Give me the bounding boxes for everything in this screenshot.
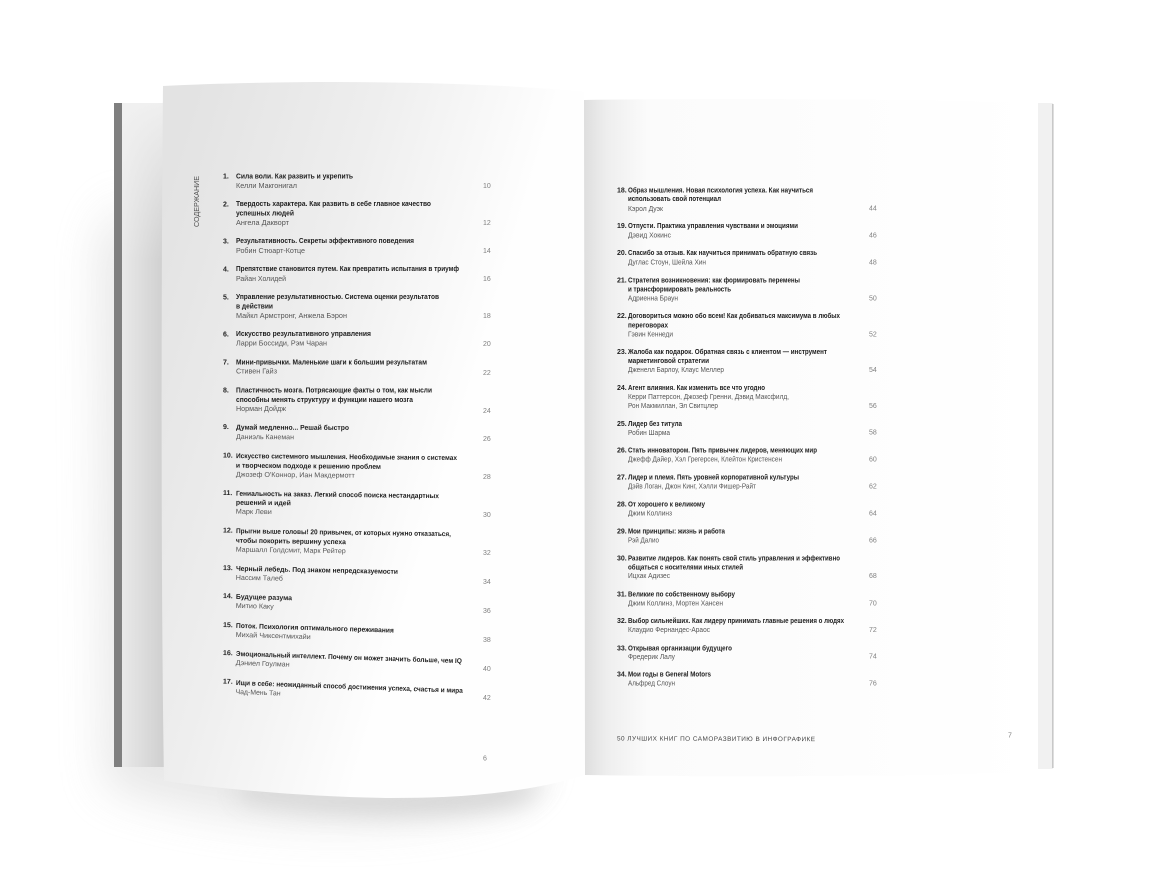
entry 25	[617, 420, 877, 437]
entry 20: 20.	[617, 250, 627, 257]
entry 24: Керри Паттерсон, Джозеф Гренни, Дэвид Максфилд,	[628, 394, 789, 401]
entry 14: Митио Каку	[236, 603, 274, 611]
entry 28: Джим Коллинз	[628, 510, 672, 518]
entry 4	[223, 266, 491, 283]
entry 1: Сила воли. Как развить и укрепить	[236, 174, 354, 180]
entry 3: Результативность. Секреты эффективного поведения	[236, 238, 414, 245]
entry 7: Мини-привычки. Маленькие шаги к большим результатам	[236, 358, 427, 366]
entry 18: 18.	[617, 188, 627, 194]
entry 15: Поток. Психология оптимального переживания	[236, 623, 394, 635]
entry 19: Дэвид Хокинс	[628, 232, 671, 240]
entry 5: 5.	[223, 294, 229, 302]
entry 22: переговорах	[628, 322, 668, 330]
entry 34: Мои годы в General Motors	[628, 672, 711, 678]
entry 10: 28	[483, 474, 491, 481]
entry 29: 66	[869, 538, 877, 544]
entry 8: Пластичность мозга. Потрясающие факты о том, как мысли	[236, 388, 432, 394]
entry 22: 52	[869, 332, 877, 338]
entry 25: 25.	[617, 421, 627, 428]
entry 21	[617, 278, 877, 302]
book drop shadow	[100, 200, 550, 821]
entry 21: 21.	[617, 278, 627, 284]
entry 14: 36	[483, 608, 491, 615]
entry 7: Стивен Гайз	[236, 368, 277, 376]
entry 19: 19.	[617, 223, 627, 230]
underlying left pages	[122, 103, 166, 767]
entry 18: Образ мышления. Новая психология успеха. Как научиться	[628, 186, 813, 194]
entry 15: 38	[483, 637, 491, 644]
entry 15	[223, 622, 491, 644]
entry 29: Мои принципы: жизнь и работа	[628, 528, 725, 536]
entry 18: 44	[869, 206, 877, 212]
entry 23: 54	[869, 367, 877, 374]
entry 24	[617, 385, 877, 410]
entry 30: Ицхак Адизес	[628, 573, 670, 580]
entry 17: 17.	[223, 679, 233, 686]
entry 12: Прыгни выше головы! 20 привычек, от которых нужно отказаться,	[236, 528, 451, 538]
entry 26	[617, 448, 877, 464]
entry 23: маркетинговой стратегии	[628, 357, 709, 365]
entry 7	[223, 358, 491, 377]
entry 11: Гениальность на заказ. Легкий способ поиска нестандартных	[236, 490, 439, 500]
entry 9	[223, 424, 491, 443]
entry 5: Майкл Армстронг, Анжела Бэрон	[236, 312, 347, 320]
entry 23: Жалоба как подарок. Обратная связь с клиентом — инструмент	[627, 348, 827, 356]
entry 6: Ларри Боссиди, Рэм Чаран	[236, 340, 327, 348]
entry 9: 26	[483, 436, 491, 443]
entry 26: 60	[869, 456, 877, 464]
entry 7: 22	[483, 370, 491, 377]
entry 15: 15.	[223, 622, 233, 629]
right contents list	[617, 186, 877, 688]
entry 6	[223, 331, 491, 348]
entry 3: Робин Стюарт-Котце	[236, 247, 305, 255]
entry 33: Фредерик Лалу	[628, 654, 675, 661]
left page	[162, 82, 585, 798]
entry 5: в действии	[236, 302, 273, 310]
entry 26: 26.	[617, 448, 627, 454]
entry 16: 40	[483, 666, 491, 673]
entry 16: Дэниел Гоулман	[236, 660, 290, 669]
left contents list	[222, 174, 491, 704]
entry 4: Райан Холидей	[236, 275, 286, 283]
entry 16: 16.	[223, 650, 233, 657]
entry 2: 12	[483, 220, 491, 227]
entry 27: Лидер и племя. Пять уровней корпоративной культуры	[628, 474, 799, 482]
entry 32: 32.	[617, 618, 627, 625]
section heading: contents: СОДЕРЖАНИЕ	[192, 176, 201, 227]
entry 14: 14.	[223, 593, 233, 600]
entry 21: и трансформировать реальность	[628, 286, 732, 294]
entry 3	[223, 238, 491, 255]
entry 20: Дуглас Стоун, Шейла Хин	[628, 258, 706, 266]
entry 10	[223, 452, 491, 481]
entry 19	[617, 223, 877, 240]
right page edge stack	[1036, 103, 1054, 769]
entry 10: Джозеф О'Коннор, Иан Макдермотт	[236, 472, 356, 480]
entry 24: 56	[869, 403, 877, 410]
entry 19: 46	[869, 232, 877, 240]
entry 26: Стать инноватором. Пять привычек лидеров, меняющих мир	[628, 448, 817, 454]
entry 24: Агент влияния. Как изменить все что угодно	[628, 385, 765, 392]
entry 8: Норман Дойдж	[236, 405, 286, 413]
entry 28	[617, 502, 877, 518]
entry 18: использовать свой потенциал	[628, 195, 721, 203]
entry 32: Выбор сильнейших. Как лидеру принимать главные решения о людях	[628, 617, 844, 625]
entry 21: Стратегия возникновения: как формировать перемены	[628, 278, 800, 284]
entry 3: 14	[483, 248, 491, 255]
entry 29	[617, 528, 877, 544]
entry 25: Лидер без титула	[628, 420, 682, 428]
entry 1: Келли Макгонигал	[236, 183, 297, 190]
entry 33: 33.	[617, 646, 627, 652]
entry 18: Кэрол Дуэк	[628, 206, 664, 213]
entry 25: Робин Шарма	[628, 429, 670, 437]
entry 11: Марк Леви	[236, 509, 272, 516]
entry 16: Эмоциональный интеллект. Почему он может значить больше, чем IQ	[236, 650, 462, 665]
right page number: 7	[1008, 732, 1012, 740]
entry 15: Михай Чиксентмихайи	[236, 631, 311, 641]
entry 9: Думай медленно... Решай быстро	[236, 424, 349, 432]
entry 17	[222, 679, 491, 704]
entry 9: Даниэль Канеман	[236, 434, 294, 441]
entry 12	[223, 528, 491, 557]
entry 12: Маршалл Голдсмит, Марк Рейтер	[236, 546, 346, 555]
entry 4: 16	[483, 276, 491, 283]
entry 17: Ищи в себе: неожиданный способ достижения успеха, счастья и мира	[236, 679, 463, 695]
entry 22	[617, 312, 877, 338]
entry 31: 70	[869, 600, 877, 608]
entry 5	[223, 294, 491, 320]
entry 19: Отпусти. Практика управления чувствами и эмоциями	[628, 223, 798, 230]
entry 8: способны менять структуру и функции нашего мозга	[236, 396, 413, 404]
entry 25: 58	[869, 430, 877, 436]
entry 12: чтобы покорить вершину успеха	[236, 537, 346, 546]
entry 14: Будущее разума	[236, 594, 292, 602]
entry 21: Адриенна Браун	[628, 296, 678, 302]
left page number: 6	[483, 756, 487, 762]
entry 8: 8.	[223, 388, 229, 394]
entry 27: 27.	[617, 474, 627, 482]
entry 22: 22.	[617, 313, 627, 320]
entry 34	[617, 672, 877, 688]
entry 30	[617, 554, 877, 580]
entry 33: 74	[869, 654, 877, 660]
entry 24: 24.	[617, 385, 627, 392]
entry 13: 34	[483, 579, 491, 586]
entry 10: Искусство системного мышления. Необходимые знания о системах	[236, 452, 457, 462]
entry 11: 30	[483, 512, 491, 519]
entry 28: 64	[869, 510, 877, 518]
entry 2: 2.	[223, 202, 229, 208]
entry 24: Рон Макмиллан, Эл Свитцлер	[628, 403, 718, 410]
entry 1	[223, 174, 491, 190]
entry 29: Рэй Далио	[628, 536, 659, 544]
entry 4: 4.	[223, 266, 229, 274]
entry 34: Альфред Слоун	[628, 680, 675, 688]
entry 18	[617, 186, 877, 213]
entry 31: Великие по собственному выбору	[628, 590, 735, 598]
entry 29: 29.	[617, 528, 627, 536]
entry 30: 68	[869, 573, 877, 580]
entry 30: Развитие лидеров. Как понять свой стиль управления и эффективно	[628, 554, 840, 562]
entry 31: 31.	[617, 592, 627, 598]
entry 8: 24	[483, 408, 491, 415]
entry 30: 30.	[617, 556, 627, 562]
entry 20: 48	[869, 260, 877, 266]
entry 14	[223, 593, 491, 615]
entry 30: общаться с носителями иных стилей	[628, 564, 743, 572]
entry 9: 9.	[223, 424, 229, 431]
entry 21: 50	[869, 296, 877, 302]
entry 28: 28.	[617, 502, 627, 508]
entry 5: Управление результативностью. Система оценки результатов	[236, 294, 440, 301]
entry 2: Ангела Дакворт	[236, 220, 290, 227]
entry 17: Чад-Мень Тан	[235, 689, 281, 698]
entry 34: 34.	[617, 672, 627, 678]
entry 11	[223, 490, 491, 519]
entry 33: Открывая организации будущего	[628, 644, 732, 652]
entry 23: Дженелл Барлоу, Клаус Меллер	[628, 367, 724, 374]
book title footer: 50 ЛУЧШИХ КНИГ ПО САМОРАЗВИТИЮ В ИНФОГРАФИКЕ	[617, 736, 815, 743]
entry 3: 3.	[223, 238, 229, 246]
entry 23: 23.	[617, 349, 627, 356]
entry 32: Клаудио Фернандес-Араос	[628, 627, 710, 634]
entry 6: 6.	[223, 332, 229, 338]
entry 5: 18	[483, 313, 491, 320]
entry 2: Твердость характера. Как развить в себе главное качество	[236, 200, 431, 208]
back cover edge	[114, 103, 122, 767]
entry 8	[223, 388, 491, 415]
entry 22: Гэвин Кеннеди	[628, 332, 673, 338]
entry 6: 20	[483, 341, 491, 348]
entry 28: От хорошего к великому	[628, 502, 705, 508]
entry 13: Нассим Талеб	[236, 574, 283, 583]
entry 12: 32	[483, 550, 491, 557]
entry 12: 12.	[223, 528, 233, 535]
entry 31: Джим Коллинз, Мортен Хансен	[628, 600, 723, 608]
entry 34: 76	[869, 680, 877, 688]
entry 10: 10.	[223, 453, 233, 460]
entry 1: 10	[483, 183, 491, 190]
entry 27: Дэйв Логан, Джон Кинг, Хэлли Фишер-Райт	[628, 482, 757, 490]
entry 6: Искусство результативного управления	[236, 331, 371, 338]
entry 13: 13.	[223, 565, 233, 572]
entry 32: 72	[869, 627, 877, 634]
entry 2	[223, 200, 491, 227]
entry 10: и творческом подходе к решению проблем	[236, 462, 381, 471]
entry 22: Договориться можно обо всем! Как добиваться максимума в любых	[628, 312, 840, 320]
right page	[584, 99, 1038, 776]
entry 4: Препятствие становится путем. Как превратить испытания в триумф	[236, 266, 459, 273]
entry 32	[617, 617, 877, 634]
entry 26: Джефф Дайер, Хэл Грегерсен, Клейтон Кристенсен	[628, 456, 782, 464]
entry 1: 1.	[223, 174, 229, 180]
entry 11: 11.	[223, 490, 232, 497]
entry 33	[617, 644, 877, 661]
entry 13	[223, 565, 491, 586]
entry 11: решений и идей	[236, 499, 291, 507]
entry 7: 7.	[223, 360, 229, 366]
entry 2: успешных людей	[236, 210, 294, 218]
entry 20	[617, 249, 877, 266]
entry 27: 62	[869, 484, 877, 490]
entry 16	[223, 650, 491, 674]
entry 27	[617, 474, 877, 490]
entry 13: Черный лебедь. Под знаком непредсказуемости	[236, 565, 398, 576]
entry 17: 42	[483, 695, 491, 702]
entry 31	[617, 590, 877, 608]
entry 23	[617, 348, 877, 374]
entry 20: Спасибо за отзыв. Как научиться принимать обратную связь	[628, 249, 818, 257]
